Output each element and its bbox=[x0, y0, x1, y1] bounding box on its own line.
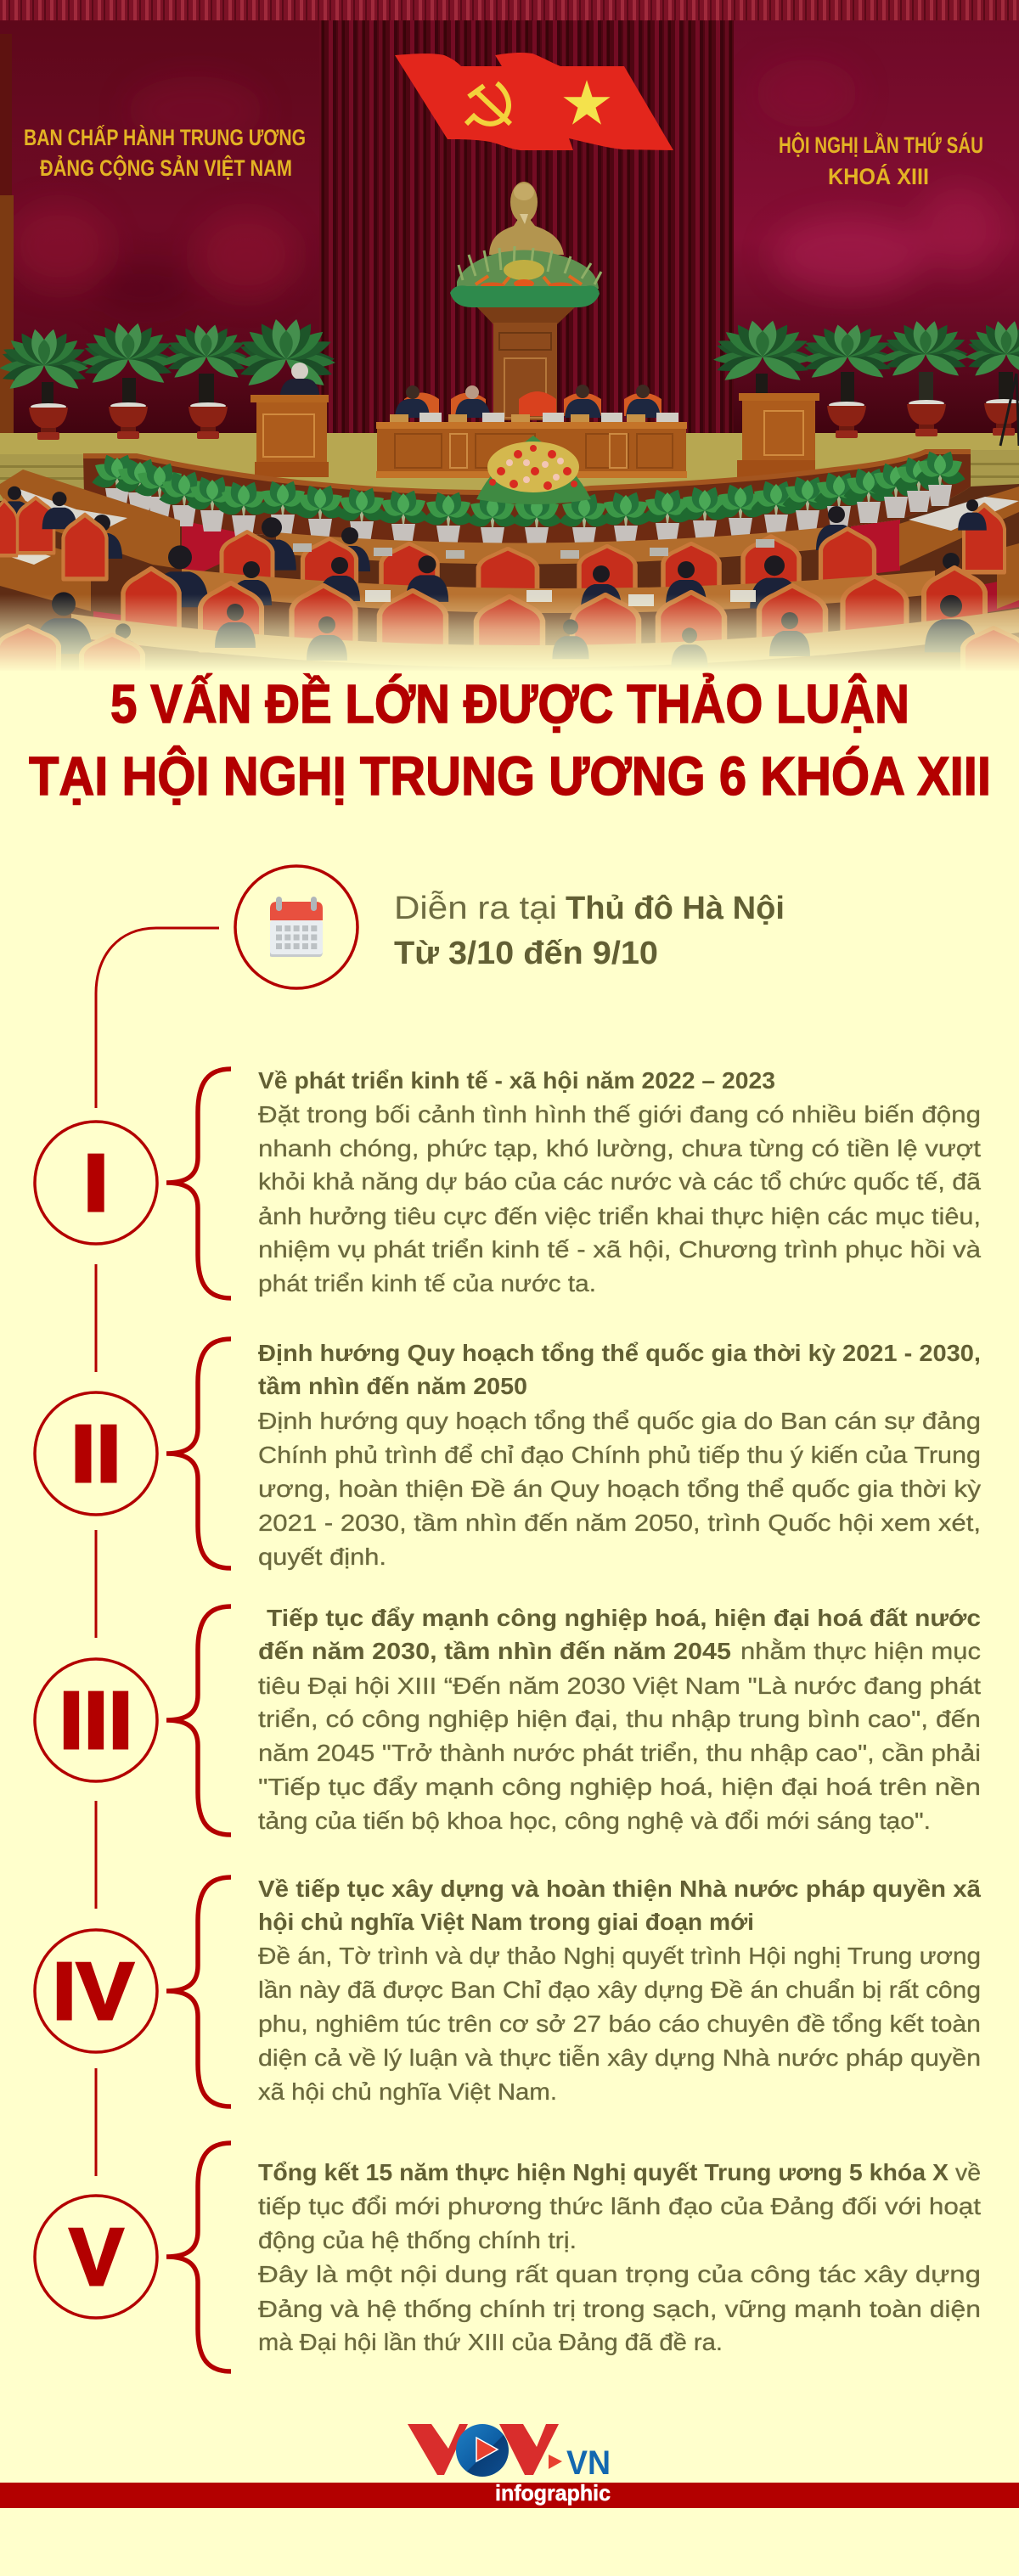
text block III: Tiếp tục đẩy mạnh công nghiệp hoá, hiện đại hoá đất nước bbox=[267, 1605, 981, 1631]
connector II to III bbox=[95, 1530, 97, 1638]
numeral circle II bbox=[35, 1392, 157, 1515]
icon: yellow star bbox=[563, 80, 611, 125]
panel: issue V bbox=[35, 2143, 981, 2371]
numeral circle I: I bbox=[83, 1138, 109, 1229]
text block V: động của hệ thống chính trị. bbox=[258, 2227, 577, 2253]
hero photo: plenary hall bbox=[0, 0, 1019, 705]
body text I: khỏi khả năng dự báo của các nước và các tổ chức quốc tế, đã bbox=[258, 1168, 981, 1195]
heading II bbox=[258, 1340, 981, 1399]
heading II: tầm nhìn đến năm 2050 bbox=[258, 1373, 527, 1399]
event place and date: Diễn ra tại bbox=[394, 890, 557, 926]
left velvet wall panel bbox=[0, 0, 319, 442]
wall top rail bbox=[83, 452, 971, 492]
infographic label: infographic bbox=[495, 2480, 611, 2506]
panel: issue III bbox=[35, 1605, 981, 1835]
fade to cream bbox=[0, 594, 1019, 672]
heading IV bbox=[258, 1876, 981, 1935]
body text I: ảnh hưởng tiêu cực đến việc triển khai thực hiện các mục tiêu, bbox=[258, 1203, 981, 1229]
curved wall below stage bbox=[83, 452, 971, 543]
body text I: Đặt trong bối cảnh tình hình thế giới đang có nhiều biến động bbox=[258, 1101, 981, 1128]
text block V: mà Đại hội lần thứ XIII của Đảng đã đề ra. bbox=[258, 2329, 723, 2355]
text block V: về bbox=[955, 2159, 981, 2185]
connector III to IV bbox=[95, 1801, 97, 1909]
left wall text: ĐẢNG CỘNG SẢN VIỆT NAM bbox=[40, 154, 292, 181]
side delegates bbox=[0, 487, 1005, 579]
text block V bbox=[258, 2159, 981, 2355]
title: 5 VẤN ĐỀ LỚN ĐƯỢC THẢO LUẬN bbox=[110, 672, 909, 734]
steps left bbox=[0, 454, 85, 505]
red party flag bbox=[395, 53, 673, 150]
numeral circle IV: IV bbox=[53, 1946, 134, 2037]
flower arrangement on pedestal bbox=[450, 246, 601, 307]
event place and date bbox=[394, 890, 785, 971]
panel: issue II bbox=[35, 1339, 981, 1570]
text block III: đến năm 2030, tầm nhìn đến năm 2045 bbox=[258, 1638, 731, 1664]
presidium chairs and members bbox=[390, 385, 678, 425]
text block III: tảng của tiến bộ khoa học, công nghệ và đổi mới sáng tạo". bbox=[258, 1808, 931, 1834]
body text II: 2021 - 2030, tầm nhìn đến năm 2050, trình Quốc hội xem xét, bbox=[258, 1510, 981, 1536]
numeral circle II: II bbox=[70, 1409, 121, 1499]
text block III: tiêu Đại hội XIII “Đến năm 2030 Việt Nam "Là nước đang phát bbox=[258, 1673, 981, 1699]
text block III bbox=[258, 1605, 981, 1834]
left wall text: BAN CHẤP HÀNH TRUNG ƯƠNG bbox=[24, 124, 306, 150]
camera tripod bbox=[1000, 374, 1019, 446]
numeral circle V bbox=[35, 2196, 157, 2318]
numeral circle III bbox=[35, 1659, 157, 1781]
pedestal bbox=[477, 307, 575, 420]
icon: calendar in circle bbox=[235, 866, 357, 988]
side desks left bbox=[0, 470, 180, 611]
brace IV bbox=[166, 1877, 231, 2106]
numeral circle I bbox=[35, 1122, 157, 1244]
body text IV: Đề án, Tờ trình và dự thảo Nghị quyết trình Hội nghị Trung ương bbox=[258, 1943, 981, 1969]
body text I: nhiệm vụ phát triển kinh tế - xã hội, Chương trình phục hồi và bbox=[258, 1236, 981, 1263]
text block III: "Tiếp tục đẩy mạnh công nghiệp hoá, hiện đại hoá trên nền bbox=[258, 1774, 981, 1800]
brace V bbox=[166, 2143, 231, 2371]
brace III bbox=[166, 1606, 231, 1835]
side desks right bbox=[899, 487, 1019, 609]
heading II: Định hướng Quy hoạch tổng thể quốc gia thời kỳ 2021 - 2030, bbox=[258, 1340, 981, 1366]
VOV.VN logo: VN bbox=[566, 2444, 611, 2482]
text block V: tiếp tục đổi mới phương thức lãnh đạo của Đảng đối với hoạt bbox=[258, 2193, 981, 2219]
body text IV bbox=[258, 1943, 981, 2105]
presidium desk bbox=[376, 422, 687, 478]
heading I: Về phát triển kinh tế - xã hội năm 2022 – 2023 bbox=[258, 1067, 775, 1094]
body text II: quyết định. bbox=[258, 1544, 386, 1570]
body text II: Chính phủ trình để chỉ đạo Chính phủ tiếp thu ý kiến của Trung bbox=[258, 1442, 981, 1468]
title bbox=[29, 672, 991, 807]
bronze bust bbox=[489, 182, 564, 255]
body text I: phát triển kinh tế của nước ta. bbox=[258, 1270, 596, 1296]
body text I: nhanh chóng, phức tạp, khó lường, chưa từng có tiền lệ vượt bbox=[258, 1135, 981, 1161]
body text II: Định hướng quy hoạch tổng thể quốc gia do Ban cán sự đảng bbox=[258, 1408, 981, 1434]
body text IV: phu, nghiêm túc trên cơ sở 27 báo cáo chuyên đề tổng kết toàn bbox=[258, 2011, 981, 2037]
first delegate row bbox=[222, 506, 875, 600]
right velvet wall panel bbox=[734, 0, 1019, 433]
seating area base bbox=[0, 484, 1019, 679]
event place and date: Từ 3/10 đến 9/10 bbox=[394, 936, 658, 971]
connector I to II bbox=[95, 1264, 97, 1372]
right wall text: KHOÁ XIII bbox=[828, 163, 929, 189]
text block III: nhằm thực hiện mục bbox=[740, 1638, 981, 1664]
top valance bbox=[0, 0, 1019, 20]
body text II bbox=[258, 1408, 981, 1570]
connector from calendar to first circle bbox=[96, 928, 219, 1108]
brace I bbox=[166, 1069, 231, 1298]
heading IV: hội chủ nghĩa Việt Nam trong giai đoạn mới bbox=[258, 1909, 754, 1935]
numeral circle IV bbox=[35, 1930, 157, 2052]
numeral circle III: III bbox=[59, 1675, 132, 1766]
left wall text bbox=[24, 124, 306, 181]
center curtain bbox=[319, 17, 734, 433]
heading IV: Về tiếp tục xây dựng và hoàn thiện Nhà nước pháp quyền xã bbox=[258, 1876, 981, 1902]
right wall text bbox=[779, 132, 983, 189]
third delegate row bbox=[0, 592, 1019, 689]
second delegate row bbox=[123, 545, 985, 664]
body text IV: xã hội chủ nghĩa Việt Nam. bbox=[258, 2078, 557, 2105]
body text I bbox=[258, 1101, 981, 1296]
right lectern bbox=[737, 393, 819, 477]
center bouquet bbox=[476, 436, 591, 504]
body text II: ương, hoàn thiện Đề án Quy hoạch tổng thể quốc gia thời kỳ bbox=[258, 1476, 981, 1502]
VOV.VN logo bbox=[408, 2424, 611, 2482]
connector IV to V bbox=[95, 2068, 97, 2176]
left lectern with speaker bbox=[251, 363, 329, 477]
brace II bbox=[166, 1339, 231, 1568]
event place and date: Thủ đô Hà Nội bbox=[566, 891, 785, 926]
row of potted plants bbox=[91, 448, 966, 548]
text block V: Tổng kết 15 năm thực hiện Nghị quyết Trung ương 5 khóa X bbox=[258, 2159, 949, 2185]
palm plants left bbox=[0, 318, 336, 440]
text block V: Đây là một nội dung rất quan trọng của công tác xây dựng bbox=[258, 2261, 981, 2287]
text block III: năm 2045 "Trở thành nước phát triển, thu nhập cao", cần phải bbox=[258, 1740, 981, 1766]
body text IV: diện cả về lý luận và thực tiễn xây dựng Nhà nước pháp quyền bbox=[258, 2044, 981, 2071]
numeral circle V: V bbox=[70, 2212, 124, 2303]
palm plants right bbox=[712, 319, 1019, 438]
panel: issue I bbox=[35, 1067, 981, 1298]
red carpet patches bbox=[93, 520, 1019, 650]
body text IV: lần này đã được Ban Chỉ đạo xây dựng Đề án chuẩn bị rất công bbox=[258, 1977, 981, 2003]
text block III: triển, có công nghiệp hiện đại, thu nhập trung bình cao", đến bbox=[258, 1706, 981, 1732]
steps right bbox=[971, 450, 1019, 501]
panel: issue IV bbox=[35, 1876, 981, 2106]
icon: hammer and sickle bbox=[466, 83, 510, 124]
text block V: Đảng và hệ thống chính trị trong sạch, vững mạnh toàn diện bbox=[258, 2296, 981, 2322]
floor of stage bbox=[0, 433, 1019, 526]
footer band bbox=[0, 2480, 1019, 2508]
